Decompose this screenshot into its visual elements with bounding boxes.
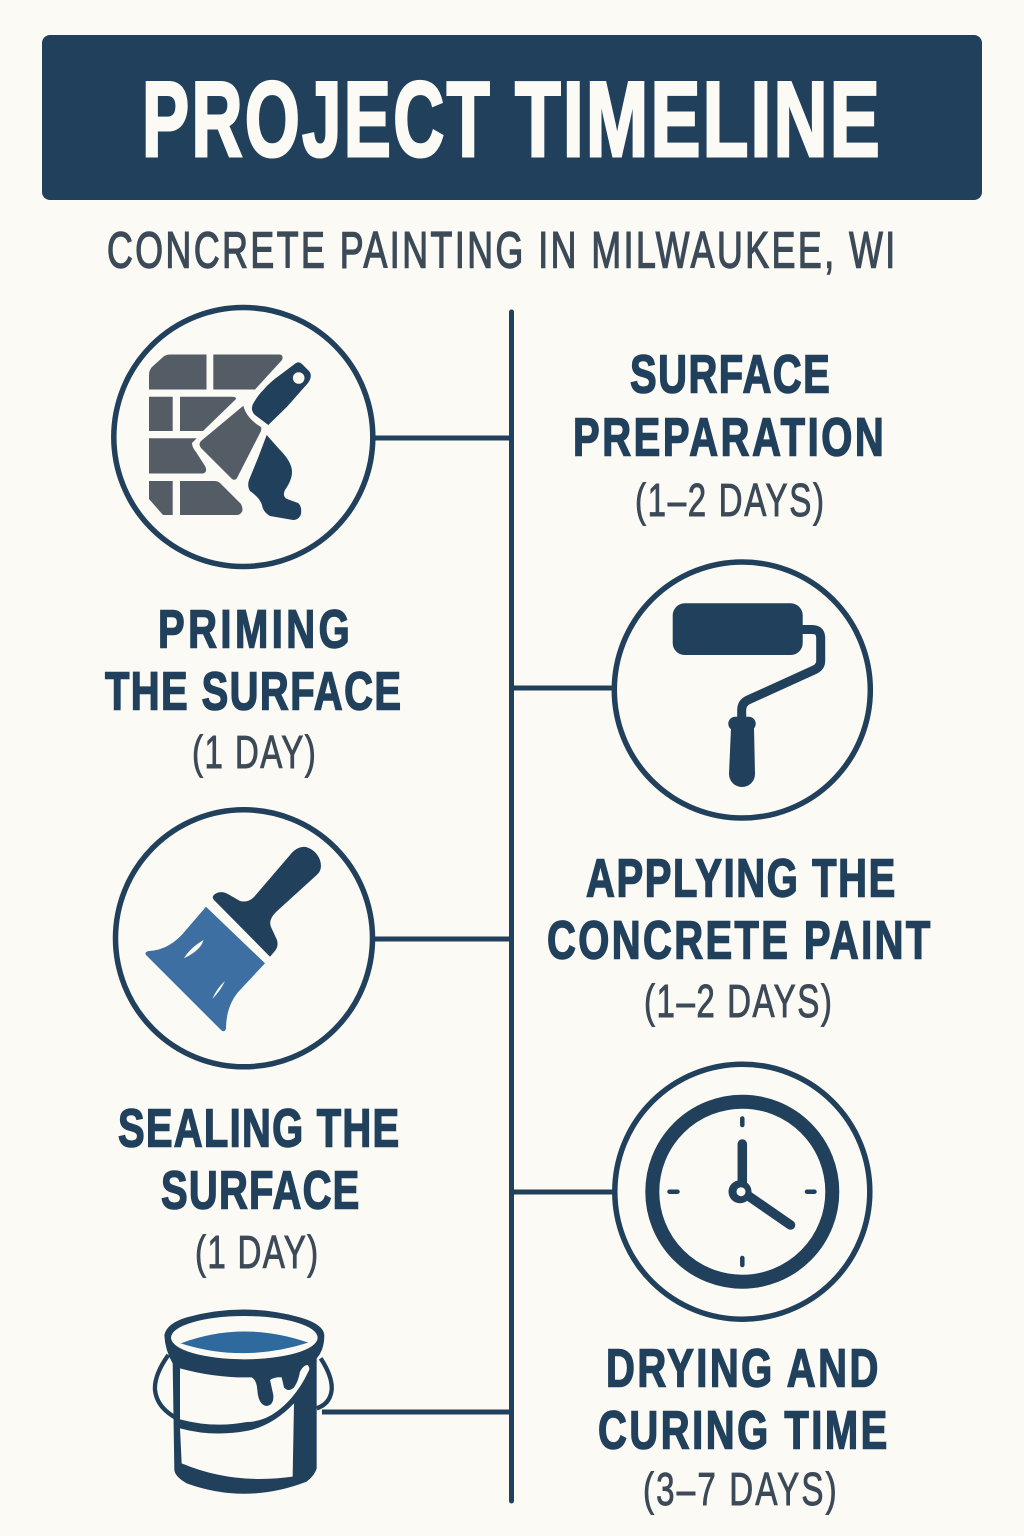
icon: paint bucket	[155, 1309, 332, 1494]
icon: paint roller	[614, 562, 870, 818]
step: priming the surface	[105, 600, 401, 778]
title banner: PROJECT	[142, 60, 490, 180]
connector: applying paint	[373, 936, 511, 942]
step: applying the concrete paint	[547, 849, 930, 1027]
step: priming the surface: PRIMING	[158, 600, 350, 660]
step: surface preparation: PREPARATION	[573, 408, 884, 468]
step: surface preparation	[573, 345, 884, 526]
title banner	[42, 35, 982, 200]
step: sealing the surface	[118, 1099, 399, 1278]
connector: priming	[511, 686, 614, 690]
step: applying the concrete paint: CONCRETE PAINT	[547, 911, 930, 971]
icon: clock	[615, 1064, 870, 1319]
step: sealing the surface: SEALING THE	[118, 1099, 399, 1159]
subtitle: CONCRETE PAINTING IN MILWAUKEE, WI	[107, 222, 895, 279]
step: priming the surface: THE SURFACE	[105, 662, 401, 722]
step: sealing the surface: SURFACE	[161, 1161, 359, 1221]
step: applying the concrete paint: APPLYING THE	[586, 849, 895, 909]
step: surface preparation: SURFACE	[630, 345, 830, 405]
icon: brick wall and trowel	[114, 308, 373, 566]
step: applying the concrete paint: (1–2 DAYS)	[644, 977, 832, 1027]
step: surface preparation: (1–2 DAYS)	[635, 476, 824, 526]
connector: paint bucket	[322, 1410, 511, 1414]
connector: surface preparation	[373, 436, 511, 440]
step: drying and curing time: CURING TIME	[598, 1401, 887, 1461]
step: priming the surface: (1 DAY)	[192, 728, 316, 778]
icon: paint brush	[116, 810, 372, 1067]
step: drying and curing time	[598, 1339, 887, 1515]
connector: sealing	[511, 1190, 615, 1194]
step: drying and curing time: DRYING AND	[606, 1339, 878, 1399]
step: drying and curing time: (3–7 DAYS)	[643, 1465, 837, 1515]
step: sealing the surface: (1 DAY)	[195, 1228, 318, 1278]
timeline spine	[509, 312, 514, 1501]
title banner: TIMELINE	[515, 59, 880, 179]
